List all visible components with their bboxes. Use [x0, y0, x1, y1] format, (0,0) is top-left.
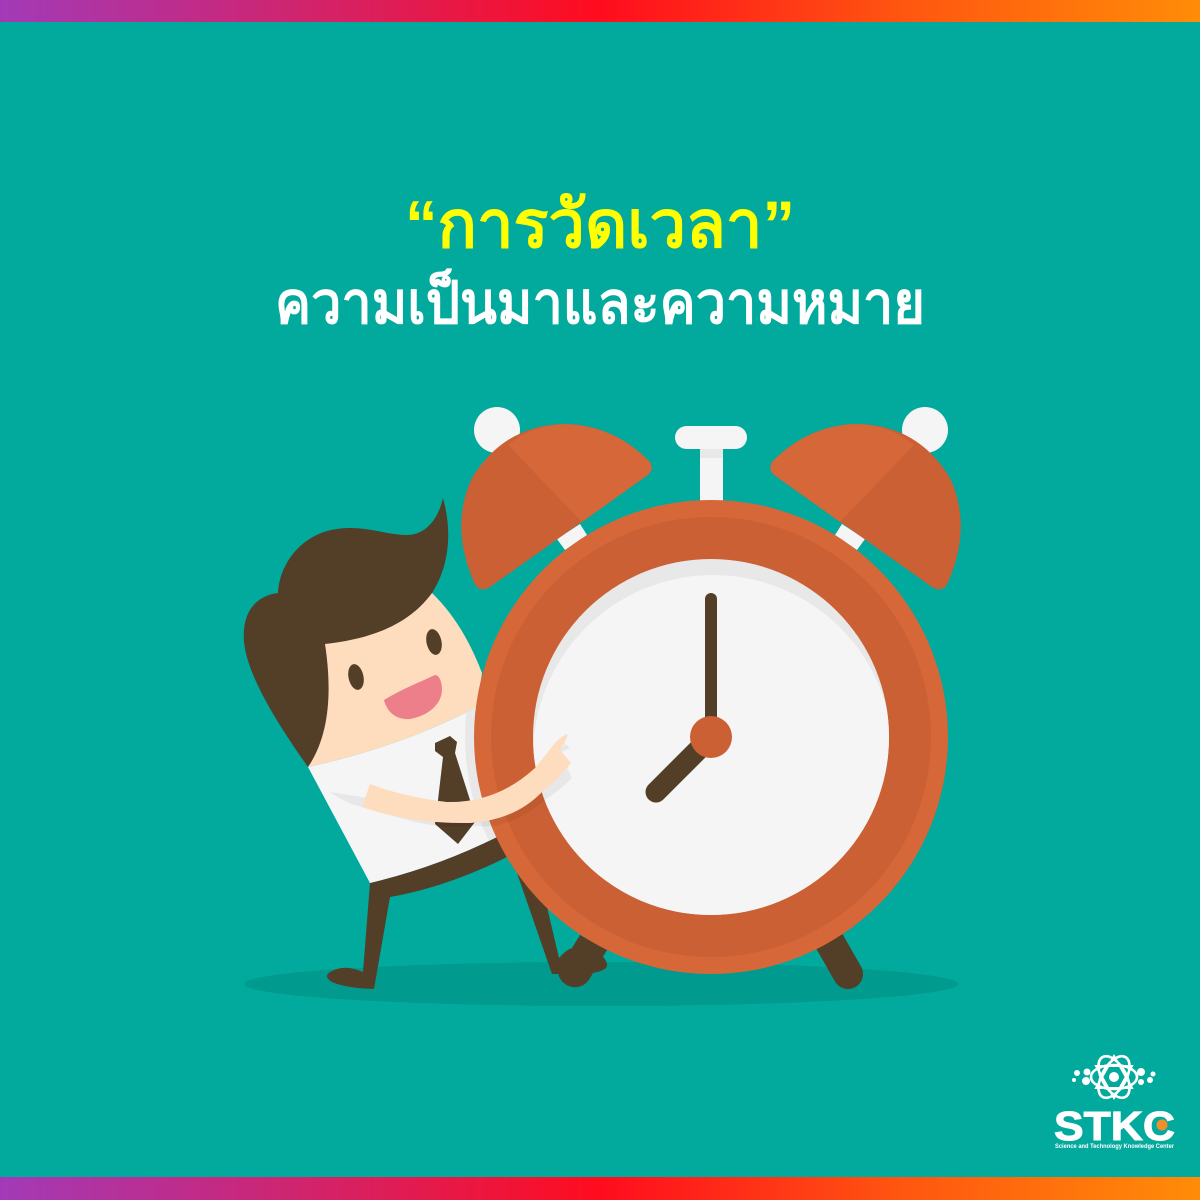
- top handle bar: [675, 426, 747, 449]
- minute hand: [705, 599, 717, 737]
- left bell: [461, 424, 652, 589]
- clock face: [533, 559, 889, 915]
- title line 2: ความเป็นมาและความหมาย: [275, 268, 925, 336]
- arm shadow: [330, 744, 572, 827]
- bottom gradient bar: [0, 1177, 1200, 1200]
- clock shadow on shirt: [465, 708, 496, 841]
- mouth: [384, 675, 442, 719]
- title line 1: “การวัดเวลา”: [405, 187, 795, 261]
- logo atom icon: [1091, 1051, 1137, 1103]
- logo: [1054, 1051, 1175, 1150]
- right bell: [770, 424, 961, 589]
- right clock leg: [820, 925, 848, 974]
- front leg and trousers: [327, 837, 507, 989]
- arm: [362, 734, 571, 823]
- eyes: [346, 628, 444, 691]
- ear: [308, 682, 329, 705]
- shirt: [308, 707, 497, 883]
- clock inner ring: [491, 517, 931, 957]
- logo dots: [1072, 1068, 1156, 1085]
- title: [275, 187, 925, 336]
- tie: [435, 736, 475, 844]
- back leg: [517, 873, 562, 974]
- bell connectors: [557, 524, 865, 550]
- centre pin: [690, 716, 732, 758]
- man's arm: [330, 734, 572, 827]
- logo accent dot: [1156, 1120, 1168, 1130]
- face: [308, 593, 482, 767]
- man: [244, 498, 559, 989]
- left clock leg and shoe: [557, 935, 607, 987]
- ground shadow: [244, 962, 958, 1006]
- alarm clock: [461, 407, 961, 987]
- logo tagline: Science and Technology Knowledge Center: [1055, 1144, 1175, 1150]
- top gradient bar: [0, 0, 1200, 22]
- top handle stem: [700, 445, 723, 505]
- hair: [244, 498, 448, 767]
- clock outer ring: [474, 500, 948, 974]
- logo wordmark: STKC: [1054, 1103, 1175, 1149]
- bell knobs: [474, 407, 520, 453]
- hour hand: [656, 737, 711, 792]
